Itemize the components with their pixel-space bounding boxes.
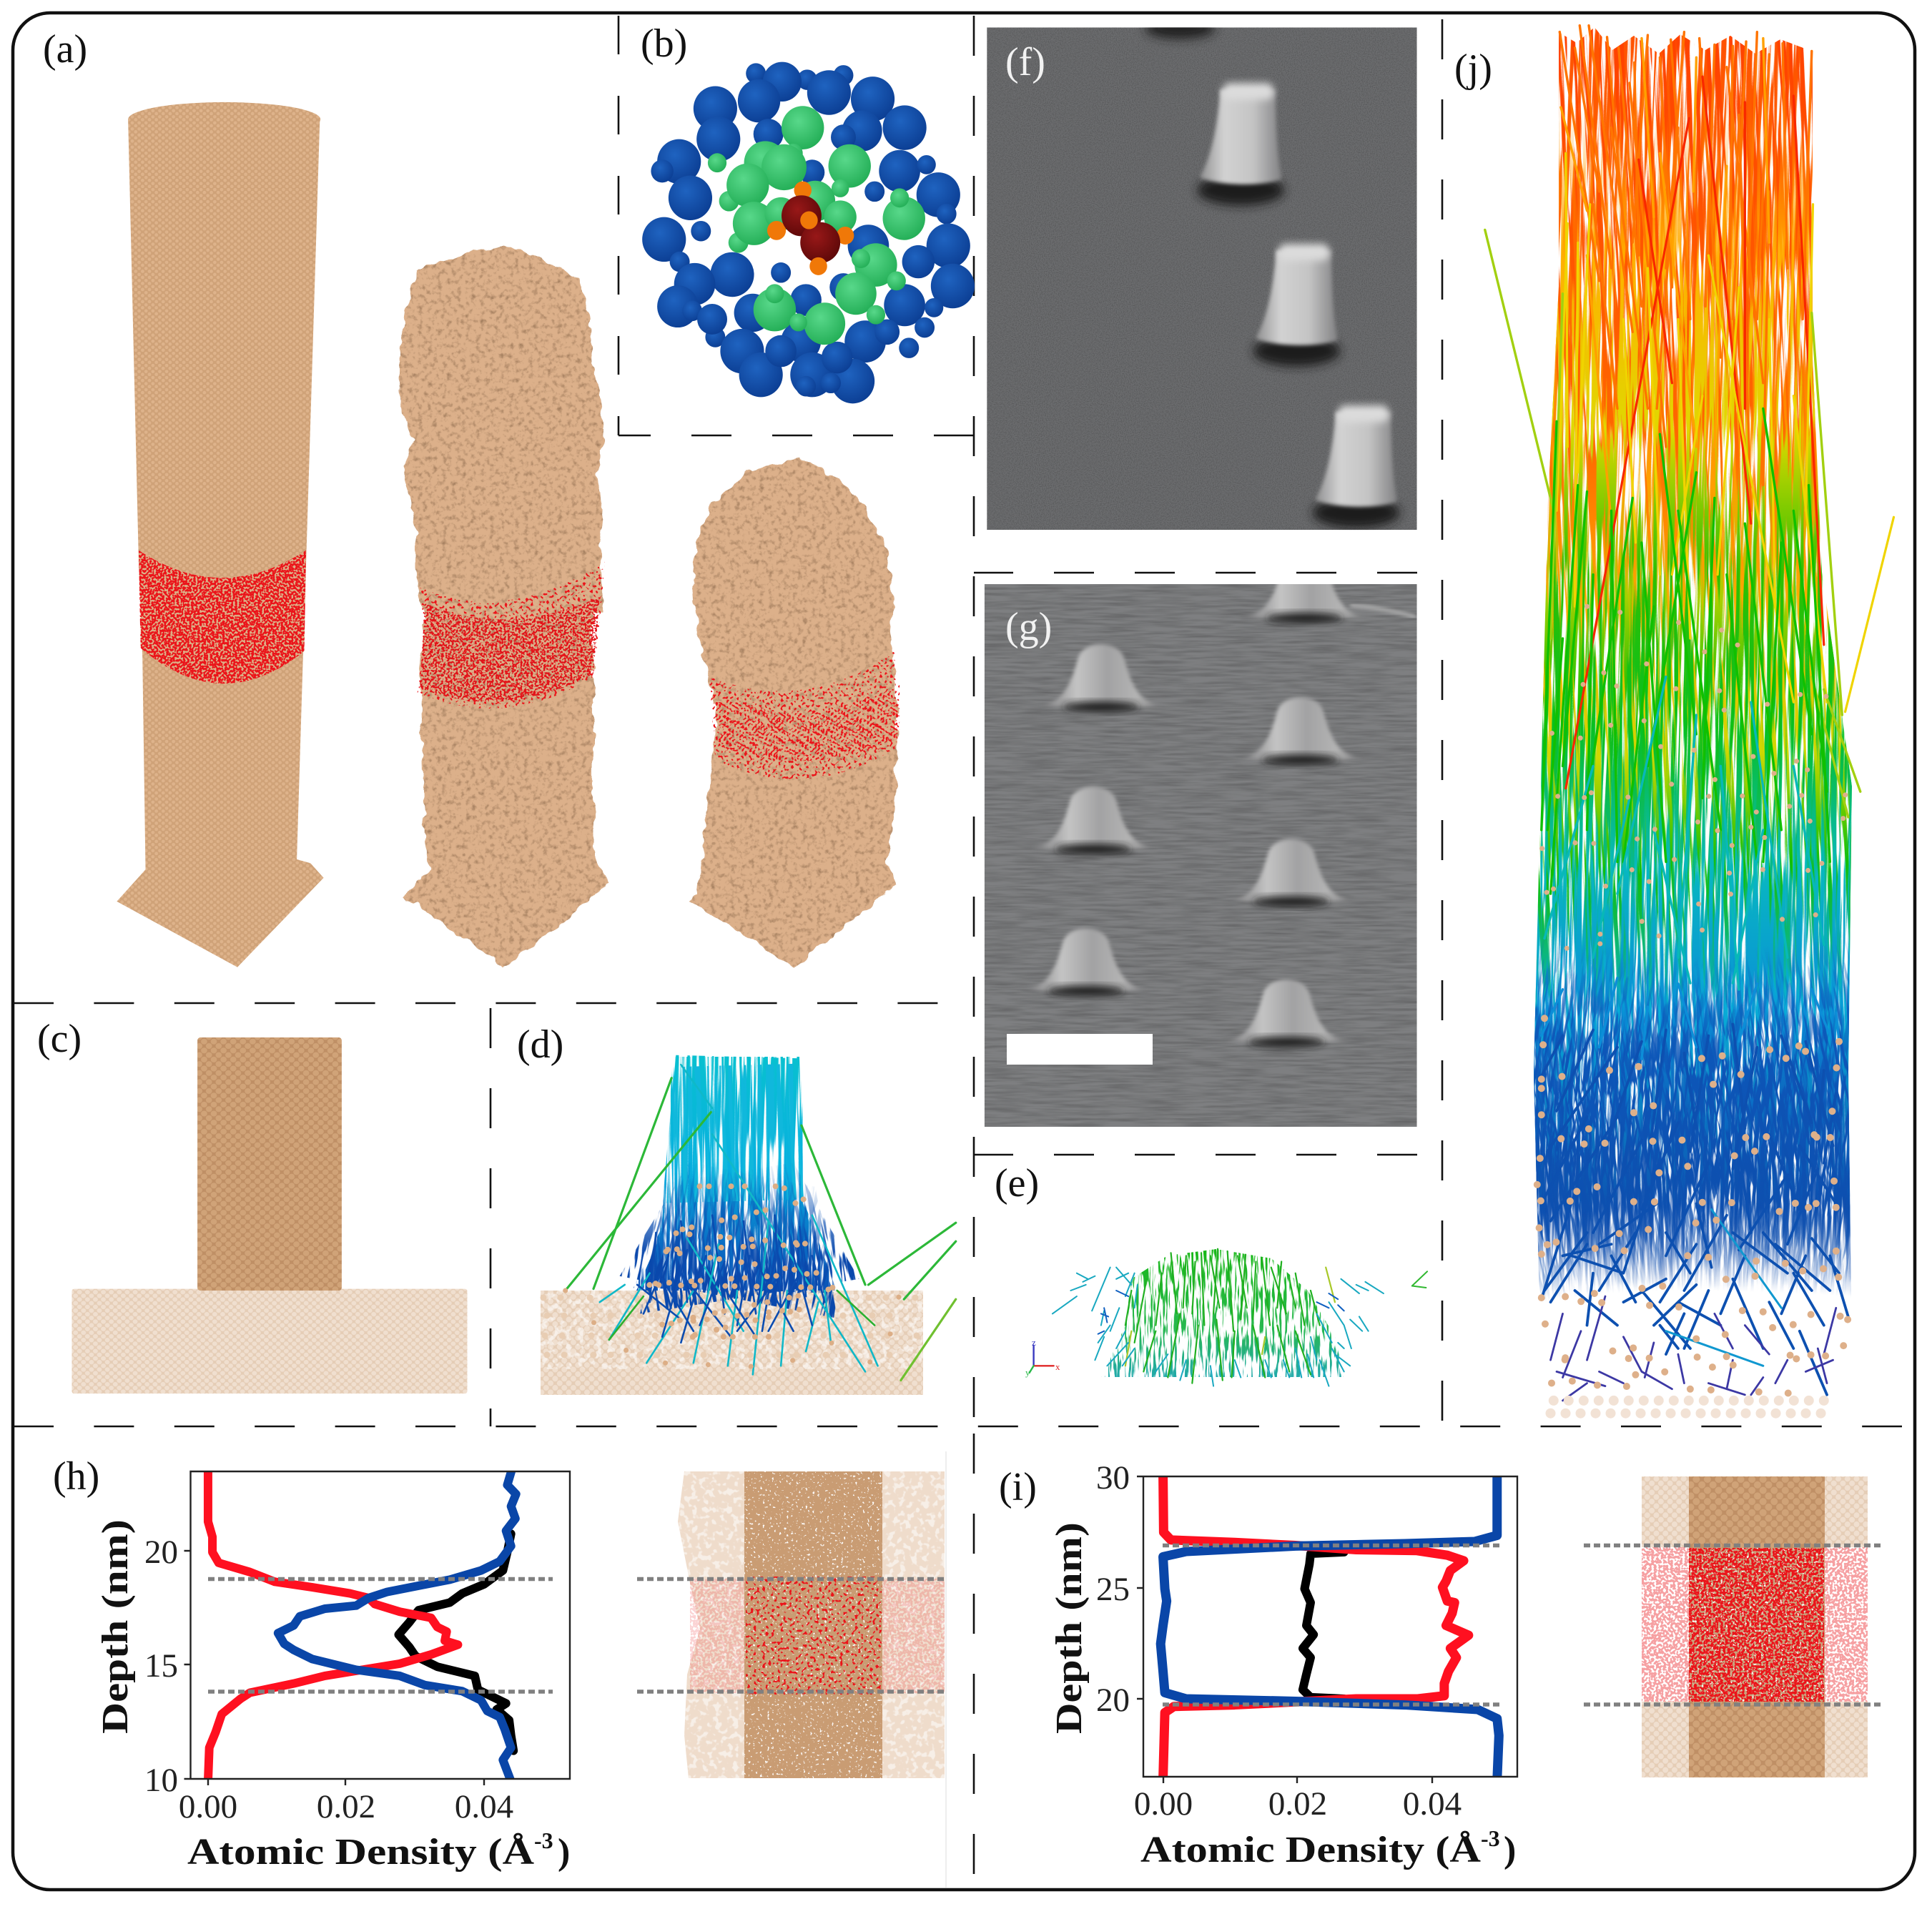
pillar 3: amorphous tilted xyxy=(687,458,900,967)
chart h y ticks: 15 xyxy=(144,1647,178,1684)
panel f label: (f) xyxy=(1005,40,1045,84)
chart i x ticks: 0.00 xyxy=(1134,1785,1193,1822)
chart h x label: -3 xyxy=(534,1827,553,1853)
SEM pillars xyxy=(1197,83,1400,528)
chart i y ticks: 25 xyxy=(1096,1571,1130,1608)
chart h curves xyxy=(208,1468,516,1781)
chart h y label: Depth (nm) xyxy=(95,1519,136,1734)
panel g: SEM micrograph xyxy=(985,556,1417,1127)
panel i label: (i) xyxy=(999,1465,1037,1509)
chart i curves xyxy=(1160,1473,1499,1780)
central core atoms xyxy=(767,182,854,275)
chart h y ticks: 20 xyxy=(144,1534,178,1571)
chart i y ticks: 20 xyxy=(1096,1682,1130,1719)
text: z xyxy=(1032,1337,1036,1348)
panel j: vector field xyxy=(1484,24,1895,1419)
panel c: pillar on substrate xyxy=(72,1037,468,1393)
chart i x ticks: 0.04 xyxy=(1403,1785,1462,1822)
panel i: atomic slice xyxy=(1584,1476,1883,1777)
panel j label: (j) xyxy=(1454,46,1492,91)
long green vectors xyxy=(566,1078,956,1299)
green central vectors xyxy=(1101,1249,1344,1383)
panel h: atomic slice xyxy=(637,1471,945,1778)
chart h y ticks: 10 xyxy=(144,1762,178,1799)
central slab xyxy=(1689,1476,1825,1777)
vector bundle xyxy=(620,1054,861,1318)
scale bar xyxy=(1007,1034,1153,1065)
blue shell atoms xyxy=(642,62,975,403)
lower vectors xyxy=(1542,978,1848,1401)
chart i y ticks xyxy=(1096,1459,1130,1719)
atom dots xyxy=(637,1186,837,1337)
chart i y ticks: 30 xyxy=(1096,1459,1130,1496)
chart i x label: Atomic Density (Å xyxy=(1140,1830,1482,1870)
chart i x label: -3 xyxy=(1481,1825,1500,1851)
chart i x ticks xyxy=(1134,1785,1462,1822)
long olive vector xyxy=(901,1299,956,1381)
chart h guide lines xyxy=(208,1579,553,1692)
panel e: short vectors xyxy=(1030,1249,1427,1386)
chart h x ticks: 0.00 xyxy=(179,1788,237,1825)
chart h x ticks: 0.02 xyxy=(317,1788,375,1825)
panel b: molecular cluster xyxy=(642,62,975,403)
panel e label: (e) xyxy=(995,1161,1039,1205)
teal vectors xyxy=(600,1065,878,1374)
chart i x ticks: 0.02 xyxy=(1268,1785,1327,1822)
atom end dots lower xyxy=(1535,1042,1848,1395)
SEM bumps xyxy=(1025,556,1365,1047)
chart i axes xyxy=(1137,1476,1517,1783)
panel h: density plot xyxy=(95,1468,570,1873)
atom edge dots lower xyxy=(1535,1018,1848,1360)
chart i y label: Depth (nm) xyxy=(1049,1522,1090,1734)
red atoms xyxy=(746,1577,882,1695)
text: y xyxy=(1025,1367,1030,1378)
chart h x label: Atomic Density (Å xyxy=(187,1832,535,1873)
substrate xyxy=(72,1289,468,1393)
chart h y ticks xyxy=(144,1534,178,1799)
chart h axes xyxy=(184,1471,570,1785)
panel h label: (h) xyxy=(53,1454,99,1499)
red atoms xyxy=(1689,1548,1824,1702)
panel d label: (d) xyxy=(517,1022,563,1067)
central slab xyxy=(744,1471,882,1778)
panel b label: (b) xyxy=(641,21,687,66)
pillar xyxy=(197,1037,342,1291)
top shadow xyxy=(1145,19,1216,39)
chart h x label: ) xyxy=(558,1832,570,1873)
chart h x ticks xyxy=(179,1788,513,1825)
atom end dots upper xyxy=(1534,606,1858,951)
blue and teal vectors xyxy=(1053,1268,1427,1386)
panel d: displacement vectors xyxy=(541,1054,956,1395)
pillar 1: crystalline xyxy=(117,102,324,967)
text: x xyxy=(1055,1361,1060,1372)
panel c label: (c) xyxy=(37,1017,82,1061)
chart h x label xyxy=(187,1827,570,1873)
substrate xyxy=(541,1291,923,1395)
chart i x label: ) xyxy=(1504,1830,1516,1870)
gradient bundle xyxy=(1534,28,1852,1300)
panel f: SEM micrograph xyxy=(987,19,1417,530)
panel a: three nanopillars xyxy=(117,102,900,967)
blue vectors xyxy=(637,1215,824,1343)
panel a label: (a) xyxy=(43,27,87,71)
pale base atoms xyxy=(1551,1401,1830,1414)
pillar 2: amorphous xyxy=(400,246,609,967)
olive-green short vectors xyxy=(609,1291,874,1340)
end dots xyxy=(566,1285,904,1367)
chart i guide lines xyxy=(1163,1546,1500,1705)
panel i: density plot xyxy=(1049,1459,1517,1870)
green shell atoms xyxy=(708,106,925,345)
upper vectors xyxy=(1485,26,1893,990)
chart h x ticks: 0.04 xyxy=(455,1788,513,1825)
panel g label: (g) xyxy=(1005,605,1052,649)
xyz axes xyxy=(1030,1346,1054,1373)
